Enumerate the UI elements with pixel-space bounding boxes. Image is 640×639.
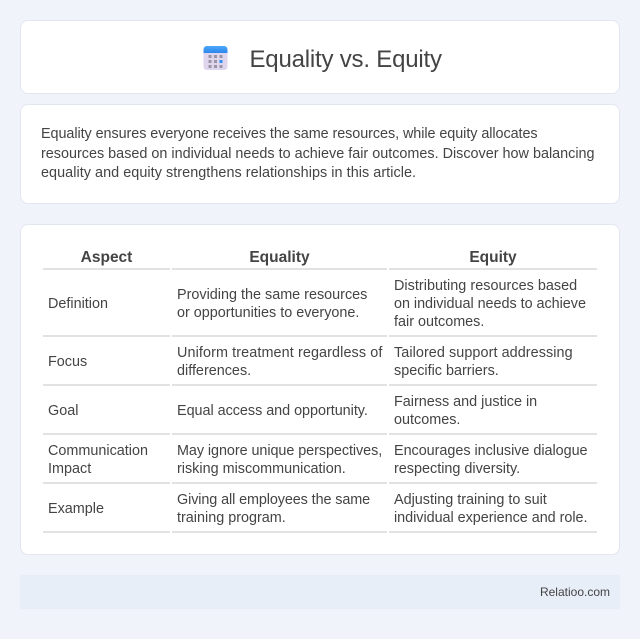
row: communication impact [48,443,148,477]
comparison table panel: specific barriers. [394,363,499,379]
icon: calendar [204,46,228,70]
comparison table panel: Fairness and justice in [394,394,537,410]
comparison table panel [20,224,620,555]
row: communication impact: Communication [48,443,148,459]
footer source: Relatioo.com [540,585,610,599]
comparison table panel: training program. [177,510,286,526]
title: Equality vs. Equity [250,46,442,72]
row: goal: Goal [48,403,78,419]
comparison table panel: individual experience and role. [394,510,587,526]
comparison table panel: differences. [177,363,251,379]
comparison table panel: outcomes. [394,412,460,428]
comparison table panel: Providing the same resources [177,287,367,303]
comparison table panel: respecting diversity. [394,461,520,477]
comparison table panel: Distributing resources based [394,278,577,294]
comparison table panel: May ignore unique perspectives, [177,443,382,459]
table header: aspect: Aspect [81,249,132,266]
row: example: Example [48,501,104,517]
intro text: resources based on individual needs to achieve fair outcomes. Discover how balancing [41,146,595,162]
intro text [41,126,595,181]
intro text: Equality ensures everyone receives the same resources, while equity allocates [41,126,538,142]
header panel [20,20,620,94]
table header: equality: Equality [249,249,310,266]
row: communication impact: Impact [48,461,91,477]
intro panel [20,104,620,204]
intro text: equality and equity strengthens relationships in this article. [41,165,416,181]
row: focus: Focus [48,354,87,370]
footer bar [20,575,620,609]
comparison table panel: Giving all employees the same [177,492,370,508]
table header: equity: Equity [469,249,517,266]
row: definition: Definition [48,296,108,312]
comparison table panel: on individual needs to achieve [394,296,586,312]
comparison table panel: Uniform treatment regardless of [177,345,382,361]
comparison table panel: or opportunities to everyone. [177,305,359,321]
comparison table panel: Adjusting training to suit [394,492,547,508]
comparison table panel: fair outcomes. [394,314,484,330]
comparison table panel: Equal access and opportunity. [177,403,368,419]
comparison table panel: Tailored support addressing [394,345,573,361]
comparison table panel: Encourages inclusive dialogue [394,443,588,459]
comparison table panel: risking miscommunication. [177,461,346,477]
